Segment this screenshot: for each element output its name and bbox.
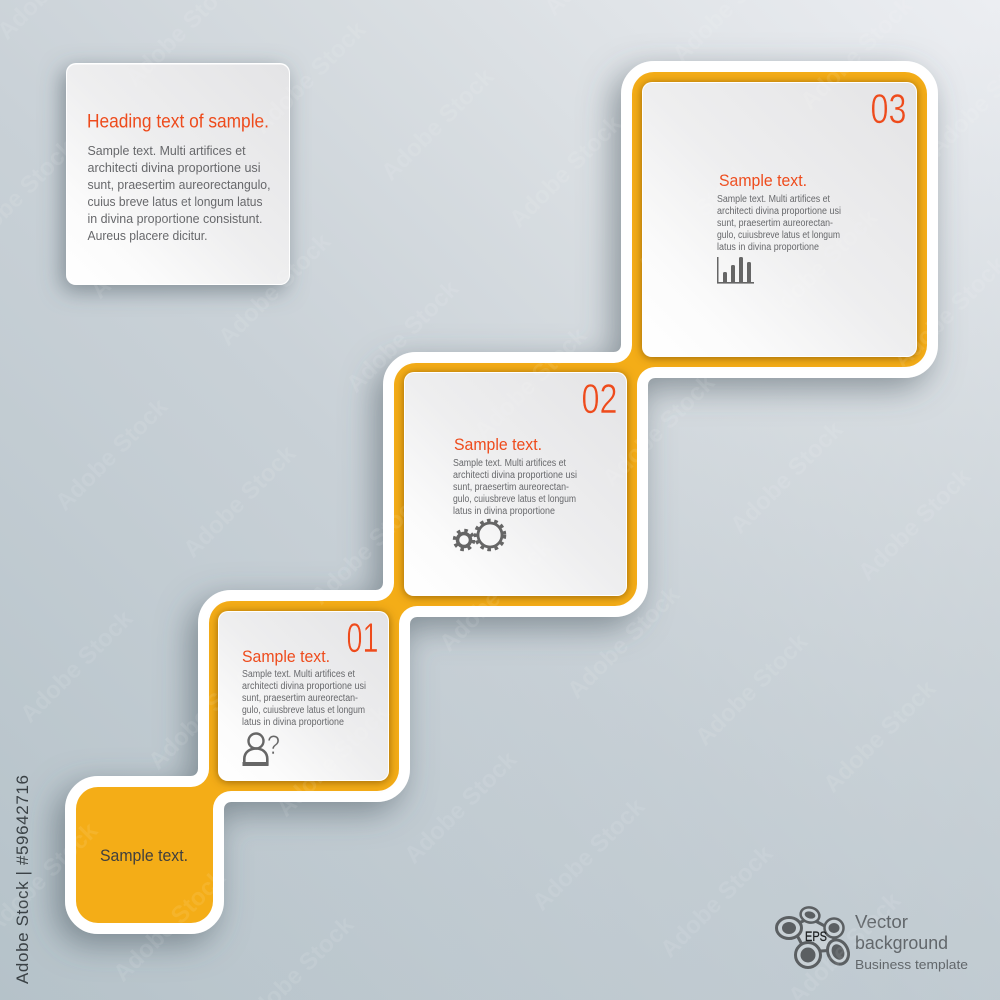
- text block: step 02: architecti divina proportione usi: [453, 470, 577, 481]
- watermark pattern: Adobe Stock: [527, 793, 651, 916]
- watermark pattern: Adobe Stock: [818, 675, 942, 798]
- text block: step 01: [242, 669, 366, 728]
- watermark pattern: Adobe Stock: [469, 322, 593, 445]
- watermark pattern: Adobe Stock: [178, 440, 302, 563]
- text block: intro: Aureus placere dicitur.: [88, 228, 208, 243]
- watermark pattern: Adobe Stock: [376, 63, 500, 186]
- watermark pattern: Adobe Stock: [399, 746, 523, 869]
- text block: step 02: sunt, praesertim aureorectan-: [453, 482, 569, 493]
- text block: step 03: [717, 194, 841, 253]
- staircase: white outline and orange band: [76, 72, 927, 923]
- text block: step 01: latus in divina proportione: [242, 717, 344, 728]
- logo: EPS badge: [776, 905, 852, 968]
- logo caption: Business template: [855, 957, 968, 972]
- watermark pattern: Adobe Stock: [143, 652, 267, 775]
- icon: person with question mark: ?: [267, 730, 280, 760]
- text block: step 02: latus in divina proportione: [453, 506, 555, 517]
- text block: step 02: Sample text. Multi artifices et: [453, 458, 566, 469]
- watermark pattern: Adobe Stock: [504, 110, 628, 233]
- text block: intro: Sample text. Multi artifices et: [88, 143, 246, 158]
- logo caption: background: [855, 933, 948, 953]
- text block: step 01: sunt, praesertim aureorectan-: [242, 693, 358, 704]
- watermark pattern: Adobe Stock: [213, 228, 337, 351]
- heading: step 01: Sample text.: [242, 648, 330, 666]
- text block: step 03: latus in divina proportione: [717, 242, 819, 253]
- watermark pattern: Adobe Stock: [85, 181, 209, 304]
- text block: intro: [88, 143, 270, 243]
- watermark pattern: Adobe Stock: [341, 275, 465, 398]
- watermark pattern: Adobe Stock: [690, 628, 814, 751]
- text block: step 02: [453, 458, 577, 517]
- number 01: 01: [346, 614, 378, 661]
- text block: step 03: architecti divina proportione usi: [717, 206, 841, 217]
- watermark pattern: Adobe Stock: [271, 699, 395, 822]
- watermark pattern: Adobe Stock: [306, 487, 430, 610]
- icon: gears: [454, 520, 504, 550]
- text block: intro: cuius breve latus et longum latus: [88, 194, 263, 209]
- number 02: 02: [582, 375, 618, 422]
- text block: step 01: gulo, cuiusbreve latus et longum: [242, 705, 365, 716]
- text block: step 01: architecti divina proportione usi: [242, 681, 366, 692]
- watermark pattern: Adobe Stock: [632, 157, 756, 280]
- logo: EPS badge: EPS: [805, 928, 827, 944]
- label: orange starting square: Sample text.: [100, 847, 188, 865]
- watermark pattern: Adobe Stock: [760, 204, 884, 327]
- text block: intro: in divina proportione consistunt.: [88, 211, 262, 226]
- text block: intro: architecti divina proportione usi: [88, 160, 261, 175]
- watermark pattern: Adobe Stock: [655, 840, 779, 963]
- icon: person with question mark: [242, 730, 280, 766]
- text block: step 02: gulo, cuiusbreve latus et longum: [453, 494, 576, 505]
- logo caption: [855, 912, 968, 972]
- watermark pattern: Adobe Stock: [725, 416, 849, 539]
- number 03: 03: [870, 85, 906, 132]
- watermark pattern: Adobe Stock: [434, 534, 558, 657]
- watermark pattern: Adobe Stock: [50, 393, 174, 516]
- text block: step 03: sunt, praesertim aureorectan-: [717, 218, 833, 229]
- logo caption: Vector: [855, 912, 908, 932]
- text block: step 03: gulo, cuiusbreve latus et longum: [717, 230, 840, 241]
- watermark pattern: Adobe Stock: [248, 16, 372, 139]
- text block: step 01: Sample text. Multi artifices et: [242, 669, 355, 680]
- panel: step 03: [642, 82, 917, 357]
- panel: step 01: [218, 611, 389, 781]
- text block: step 03: Sample text. Multi artifices et: [717, 194, 830, 205]
- heading: step 02: Sample text.: [454, 436, 542, 454]
- heading: step 03: Sample text.: [719, 172, 807, 190]
- watermark pattern: Adobe Stock: [597, 369, 721, 492]
- heading: intro: Heading text of sample.: [87, 110, 269, 132]
- panel: intro card: [66, 63, 290, 285]
- text block: intro: sunt, praesertim aureorectangulo,: [88, 177, 270, 192]
- stock credit: Adobe Stock | #59642716: [13, 775, 32, 984]
- watermark pattern: Adobe Stock: [853, 463, 977, 586]
- watermark pattern: Adobe Stock: [562, 581, 686, 704]
- watermark pattern: Adobe Stock: [108, 864, 232, 987]
- watermark pattern: Adobe Stock: [15, 605, 139, 728]
- panel: step 02: [404, 372, 627, 596]
- icon: bar chart: [717, 257, 754, 284]
